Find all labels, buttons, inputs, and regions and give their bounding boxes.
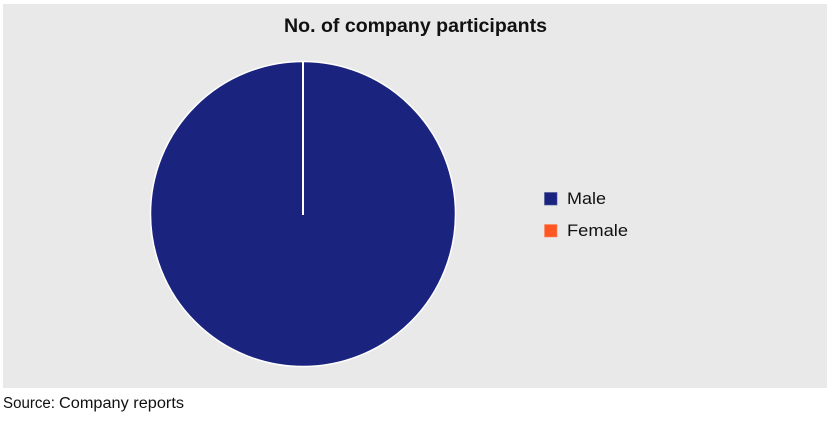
pie slice: male <box>150 62 456 366</box>
pie slice: female (zero-width divider) <box>302 61 304 215</box>
title: No. of company participants <box>284 16 547 37</box>
pie chart <box>150 61 456 366</box>
source note <box>3 395 184 412</box>
source note: Source: <box>3 395 55 412</box>
legend <box>544 189 628 240</box>
legend item: male: Male <box>567 189 606 208</box>
source note: Company reports <box>59 395 184 412</box>
legend item: female: Female <box>567 221 628 240</box>
